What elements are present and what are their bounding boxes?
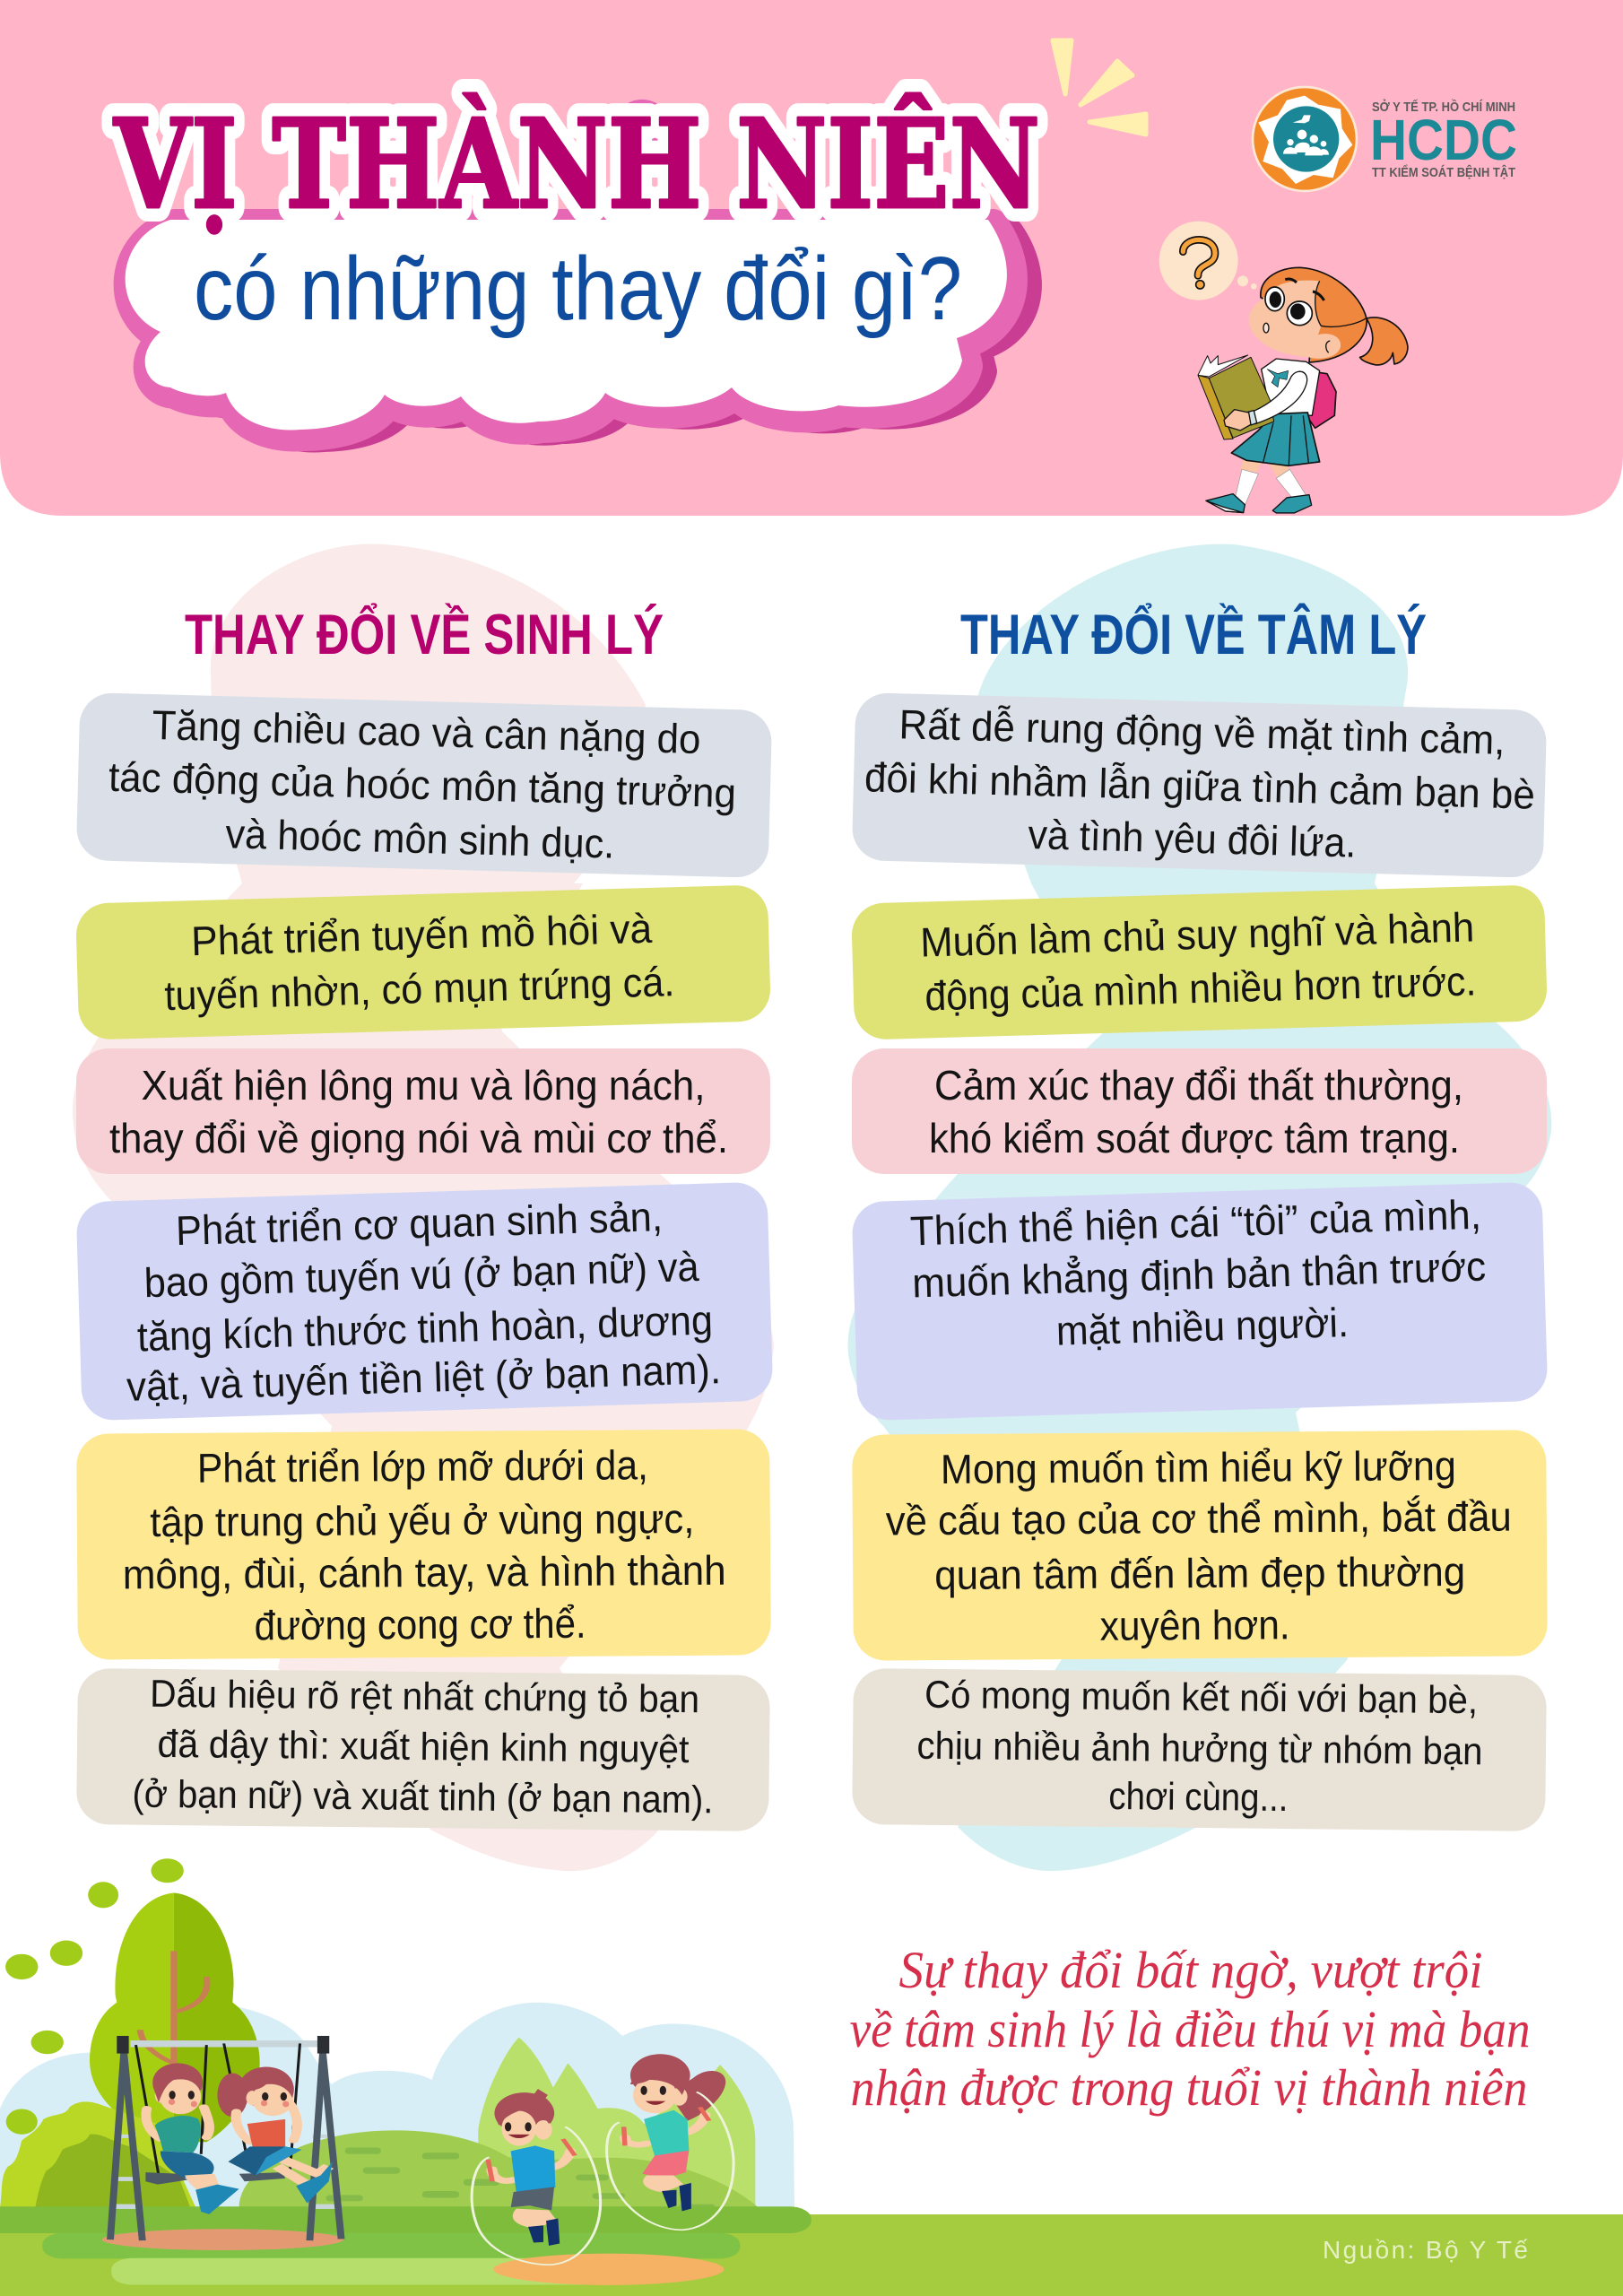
background blob: right column [848,544,1551,1871]
arm and hand [1224,371,1307,430]
backpack [1300,370,1336,428]
ground strip [0,2214,1623,2296]
bushes [0,2101,195,2207]
subtitle: có những thay đổi gì? [194,239,962,339]
logo text: TT KIỂM SOÁT BỆNH TẬT [1372,164,1515,180]
closing message [850,1941,1530,2117]
card: subcutaneous fat: mông, đùi, cánh tay, và hình thành [123,1547,726,1597]
card: body curiosity: về cấu tạo của cơ thể mình, bắt đầu [886,1493,1512,1544]
right column: psychological changes [851,692,1548,1831]
blouse [1262,359,1320,415]
orange sand patch [493,2254,724,2285]
card: body curiosity: xuyên hơn. [1099,1601,1290,1649]
face [1249,281,1341,359]
card: subcutaneous fat: đường cong cơ thể. [254,1600,586,1648]
hill dashes [326,2147,715,2208]
closing message: Sự thay đổi bất ngờ, vượt trội [898,1941,1483,1999]
card: self expression: muốn khẳng định bản thân trước [911,1243,1487,1306]
card: emotional sensitivity: đôi khi nhầm lẫn giữa tình cảm bạn bè [864,753,1536,818]
heading: THAY ĐỔI VỀ SINH LÝ: THAY ĐỔI VỀ SINH LÝ [185,603,664,666]
card: mood swings [852,1048,1547,1174]
card: clearest sign of puberty: (ở bạn nữ) và xuất tinh (ở bạn nam). [132,1773,714,1822]
left column: physical changes [75,692,773,1831]
card: clearest sign of puberty [76,1668,770,1831]
book [1198,355,1274,439]
header panel [0,0,1623,516]
title: VỊ THÀNH NIÊN [113,92,1040,237]
closing message: nhận được trong tuổi vị thành niên [850,2058,1528,2117]
cloud behind subtitle [126,100,1030,440]
closing message: về tâm sinh lý là điều thú vị mà bạn [850,2000,1530,2058]
green hills [239,2130,758,2207]
tree [90,1892,260,2142]
card: emotional sensitivity [852,692,1547,878]
logo text: HCDC [1370,108,1517,172]
shoes [1206,494,1312,513]
thought bubble [1159,222,1257,300]
bow [1267,370,1289,387]
card: subcutaneous fat [76,1429,771,1660]
card: height and weight: tác động của hoóc môn tăng trưởng [108,753,737,816]
card: self control [851,884,1548,1040]
illustration: girl with book [1159,222,1408,513]
swing sand patch [102,2229,343,2250]
card: emotional sensitivity: và tình yêu đôi lứa. [1028,811,1357,866]
card: emotional sensitivity: Rất dễ rung động về mặt tình cảm, [898,700,1506,763]
legs and socks [1235,459,1307,505]
swing frame [110,2036,342,2240]
card: self expression: mặt nhiều người. [1055,1299,1350,1354]
card: reproductive organs: bao gồm tuyến vú (ở bạn nữ) và [143,1243,700,1306]
dark grass band [0,2206,812,2233]
card: clearest sign of puberty: đã dậy thì: xuất hiện kinh nguyệt [157,1723,690,1771]
heading: THAY ĐỔI VỀ TÂM LÝ: THAY ĐỔI VỀ TÂM LÝ [960,603,1427,666]
card: friends: chịu nhiều ảnh hưởng từ nhóm bạn [916,1725,1483,1773]
falling leaves [5,1858,184,2135]
swing ropes [136,2043,300,2175]
card: height and weight: Tăng chiều cao và cân nặng do [152,701,701,762]
jumping boy [488,2089,575,2246]
card: reproductive organs: vật, và tuyến tiền liệt (ở bạn nam). [126,1345,722,1410]
background blob: left column [73,544,774,1871]
card: self expression: Thích thể hiện cái “tôi” của mình, [909,1191,1482,1255]
card: reproductive organs [76,1182,773,1421]
card: friends [852,1668,1547,1831]
card: mood swings: khó kiểm soát được tâm trạng. [929,1115,1460,1161]
card: sweat glands [75,884,771,1040]
card: body curiosity: quan tâm đến làm đẹp thường [934,1548,1465,1598]
light green peaks [478,2038,755,2207]
sky hills [0,2003,794,2207]
card: body curiosity: Mong muốn tìm hiểu kỹ lưỡng [941,1442,1456,1492]
light grass band [111,2258,655,2284]
jump ropes [472,2092,733,2265]
skirt [1231,413,1320,465]
card: self control: Muốn làm chủ suy nghĩ và hành [920,903,1475,966]
mid grass band [42,2233,740,2258]
card: self expression [852,1182,1548,1421]
card: body hair: Xuất hiện lông mu và lông nách, [142,1062,705,1109]
card: reproductive organs: Phát triển cơ quan sinh sản, [175,1193,664,1254]
jumping girl [624,2054,725,2211]
card: mood swings: Cảm xúc thay đổi thất thường, [934,1062,1463,1109]
logo text: SỞ Y TẾ TP. HỒ CHÍ MINH [1372,99,1515,115]
hair [1261,267,1367,362]
ponytail [1360,317,1408,365]
boy on swing [145,2063,239,2214]
card: subcutaneous fat: tập trung chủ yếu ở vùng ngực, [150,1495,694,1545]
card: height and weight [76,692,772,878]
illustration: playground [0,1858,812,2285]
card: friends: Có mong muốn kết nối với bạn bè, [924,1674,1478,1722]
card: sweat glands: Phát triển tuyến mồ hôi và [191,905,653,964]
title outline: VỊ THÀNH NIÊN [113,92,1040,237]
card: clearest sign of puberty: Dấu hiệu rõ rệt nhất chứng tỏ bạn [150,1673,699,1721]
logo: HCDC [1252,86,1358,192]
card: body curiosity [852,1430,1548,1661]
girl on swing [217,2066,333,2204]
source credit: Nguồn: Bộ Y Tế [1323,2236,1528,2264]
card: subcutaneous fat: Phát triển lớp mỡ dưới da, [197,1441,648,1492]
card: body hair [76,1048,770,1174]
sunburst accent [1053,40,1146,135]
card: sweat glands: tuyến nhờn, có mụn trứng cá. [164,958,675,1019]
card: reproductive organs: tăng kích thước tinh hoàn, dương [136,1296,714,1360]
card: body hair: thay đổi về giọng nói và mùi cơ thể. [109,1115,728,1161]
card: height and weight: và hoóc môn sinh dục. [225,810,615,867]
card: self control: động của mình nhiều hơn trước. [924,957,1477,1020]
card: friends: chơi cùng... [1108,1775,1289,1820]
